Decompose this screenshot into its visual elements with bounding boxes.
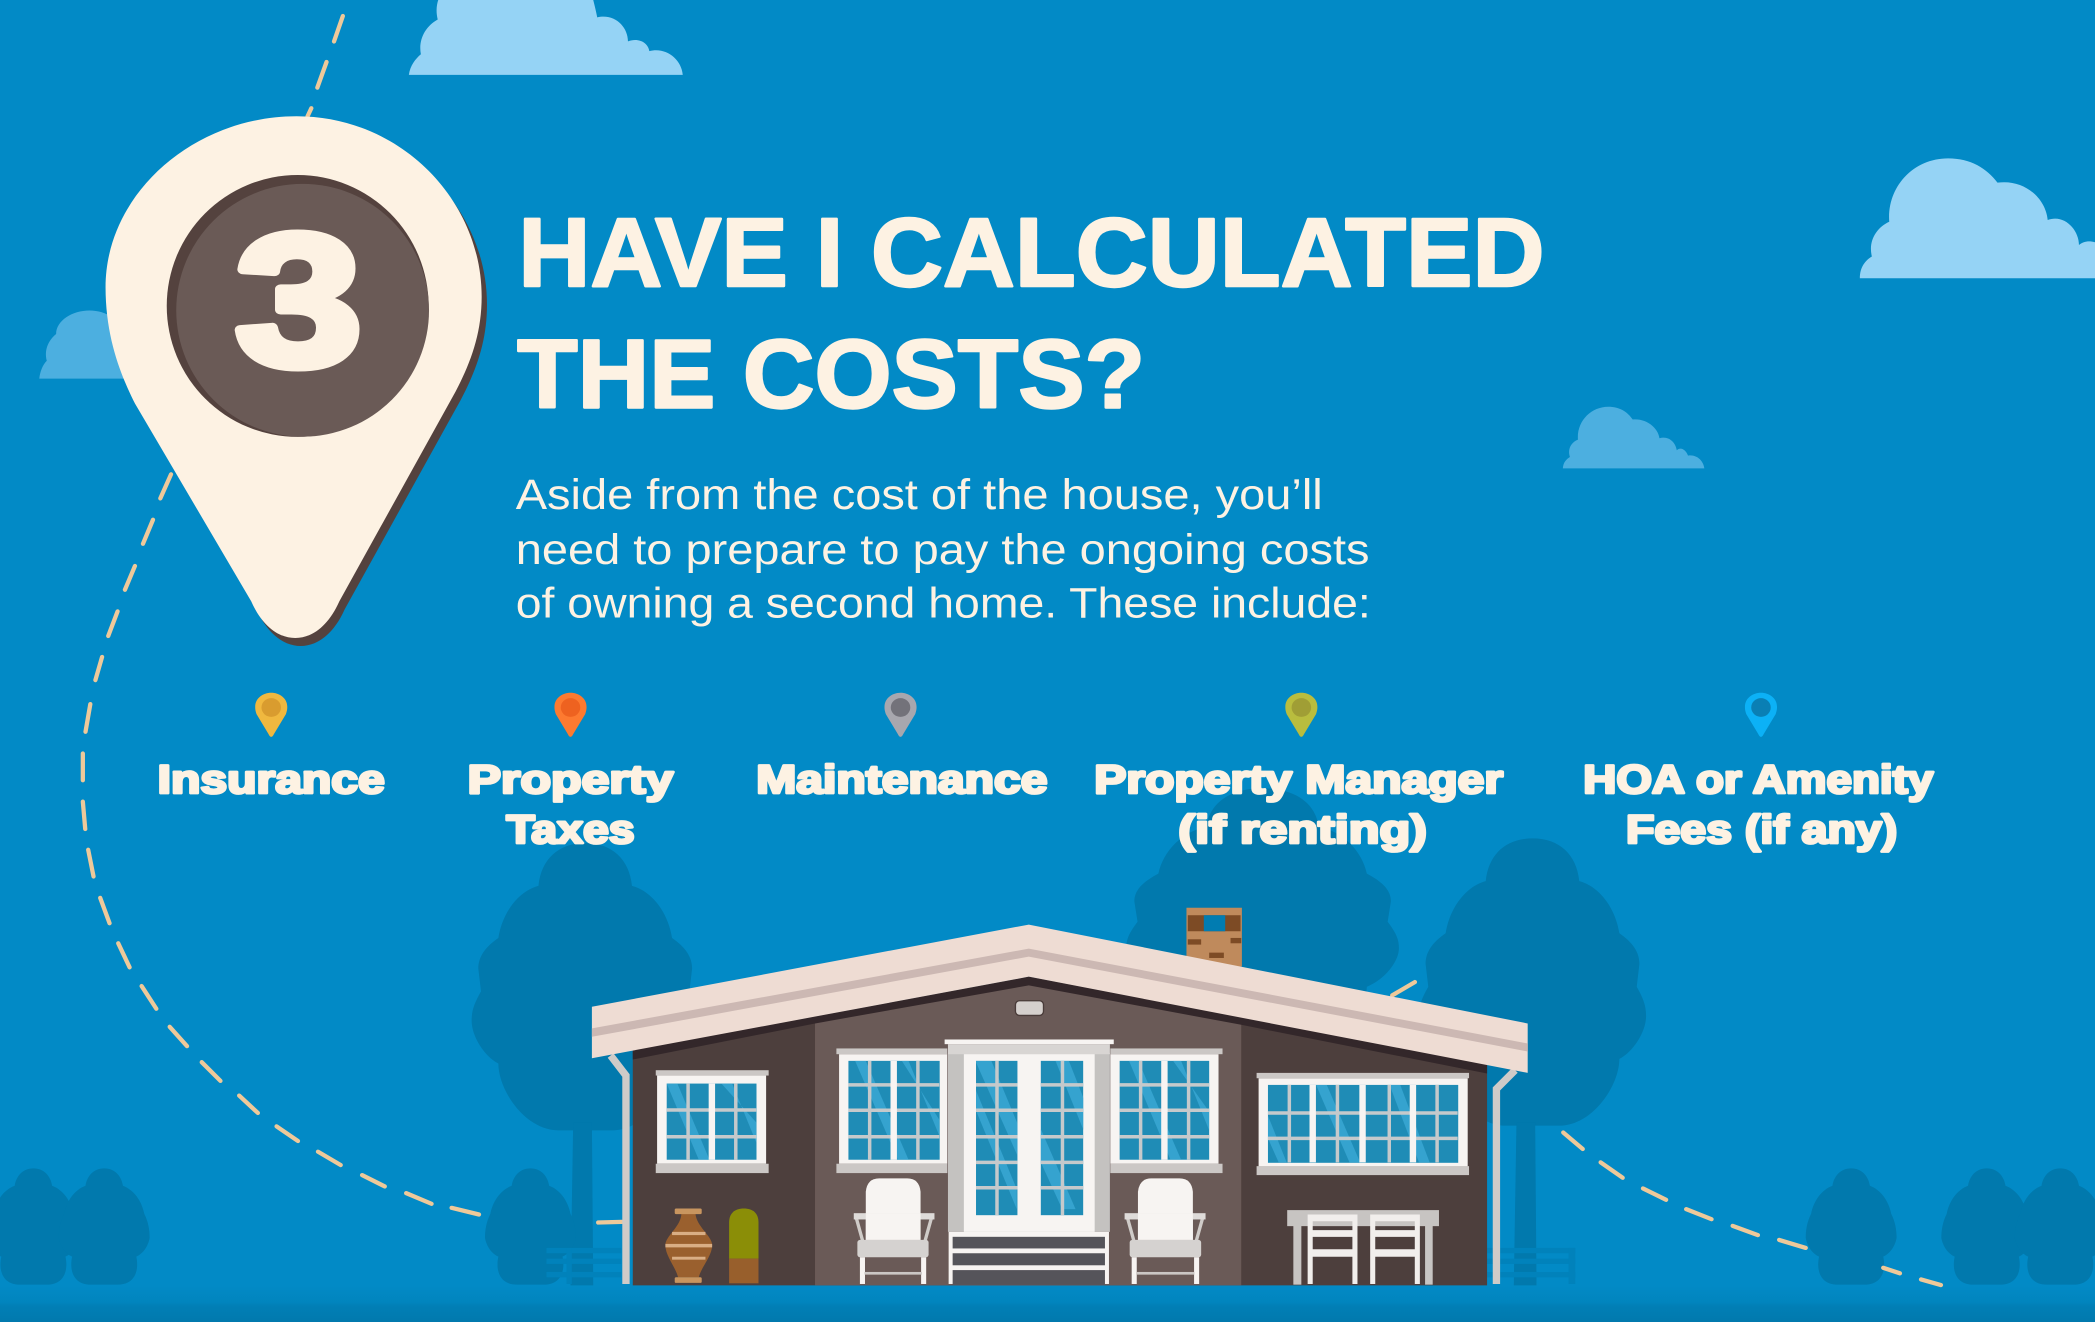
chimney <box>1186 908 1242 967</box>
item: property taxes <box>468 693 673 852</box>
pin body <box>106 116 482 638</box>
pin shadow <box>111 124 487 646</box>
item: HOA or amenity fees: Fees (if any) <box>1626 808 1897 852</box>
bush: left of house <box>485 1168 576 1285</box>
window: right of door <box>1110 1048 1223 1173</box>
front steps <box>949 1232 1109 1285</box>
chair: right <box>1125 1178 1206 1284</box>
window: far right <box>1257 1073 1469 1175</box>
location pin with number 3 <box>106 116 487 646</box>
intro paragraph <box>516 471 1371 627</box>
bushes: far right <box>1941 1168 2095 1285</box>
bushes: far left <box>0 1168 150 1285</box>
intro paragraph: Aside from the cost of the house, you’ll <box>516 471 1323 519</box>
roof <box>592 925 1528 1073</box>
item: HOA or amenity fees <box>1583 693 1933 852</box>
number 3: 3 <box>235 196 362 405</box>
item: property manager <box>1094 693 1503 852</box>
tree: left of house <box>472 843 699 1285</box>
intro paragraph: need to prepare to pay the ongoing costs <box>516 526 1369 574</box>
icon: orange pin <box>554 693 587 737</box>
item: maintenance: Maintenance <box>756 758 1048 802</box>
item: property taxes: Taxes <box>506 808 635 852</box>
house <box>592 908 1528 1285</box>
number badge <box>167 175 429 437</box>
cloud: middle right small <box>1563 407 1704 468</box>
cloud: top right <box>1860 158 2095 278</box>
icon: blue pin <box>1745 693 1777 737</box>
vase <box>665 1208 712 1283</box>
title <box>517 198 1545 429</box>
potted plant <box>729 1208 759 1283</box>
fence: left <box>546 1248 621 1284</box>
item: HOA or amenity fees: HOA or Amenity <box>1583 758 1933 802</box>
cloud: top centre <box>409 0 683 75</box>
item: property manager: Property Manager <box>1094 758 1503 802</box>
fence: right <box>1487 1248 1575 1284</box>
title: THE COSTS? <box>517 320 1145 429</box>
item: property manager: (if renting) <box>1178 808 1427 852</box>
window: far left <box>656 1070 769 1173</box>
house walls <box>633 977 1487 1285</box>
icon: grey pin <box>884 693 917 737</box>
ground strip <box>0 1285 2095 1322</box>
chair: left <box>854 1178 934 1284</box>
roof vent <box>1015 1001 1043 1015</box>
cloud: left behind pin <box>39 311 127 379</box>
bush: right <box>1806 1168 1897 1285</box>
title: HAVE I CALCULATED <box>518 198 1545 307</box>
icon: yellow pin <box>255 693 287 737</box>
item: property taxes: Property <box>468 758 673 802</box>
tree: right of house <box>1419 838 1646 1285</box>
gutter: left <box>611 1056 626 1284</box>
window: left of door <box>836 1048 947 1173</box>
tree: behind house centre <box>1126 788 1399 1047</box>
item: insurance: Insurance <box>158 758 385 802</box>
french door <box>945 1039 1114 1232</box>
patio table and chairs <box>1287 1210 1439 1285</box>
icon: green pin <box>1285 693 1317 737</box>
intro paragraph: of owning a second home. These include: <box>516 579 1371 627</box>
item: insurance <box>158 693 385 802</box>
gutter: right <box>1496 1070 1515 1284</box>
item: maintenance <box>756 693 1048 802</box>
